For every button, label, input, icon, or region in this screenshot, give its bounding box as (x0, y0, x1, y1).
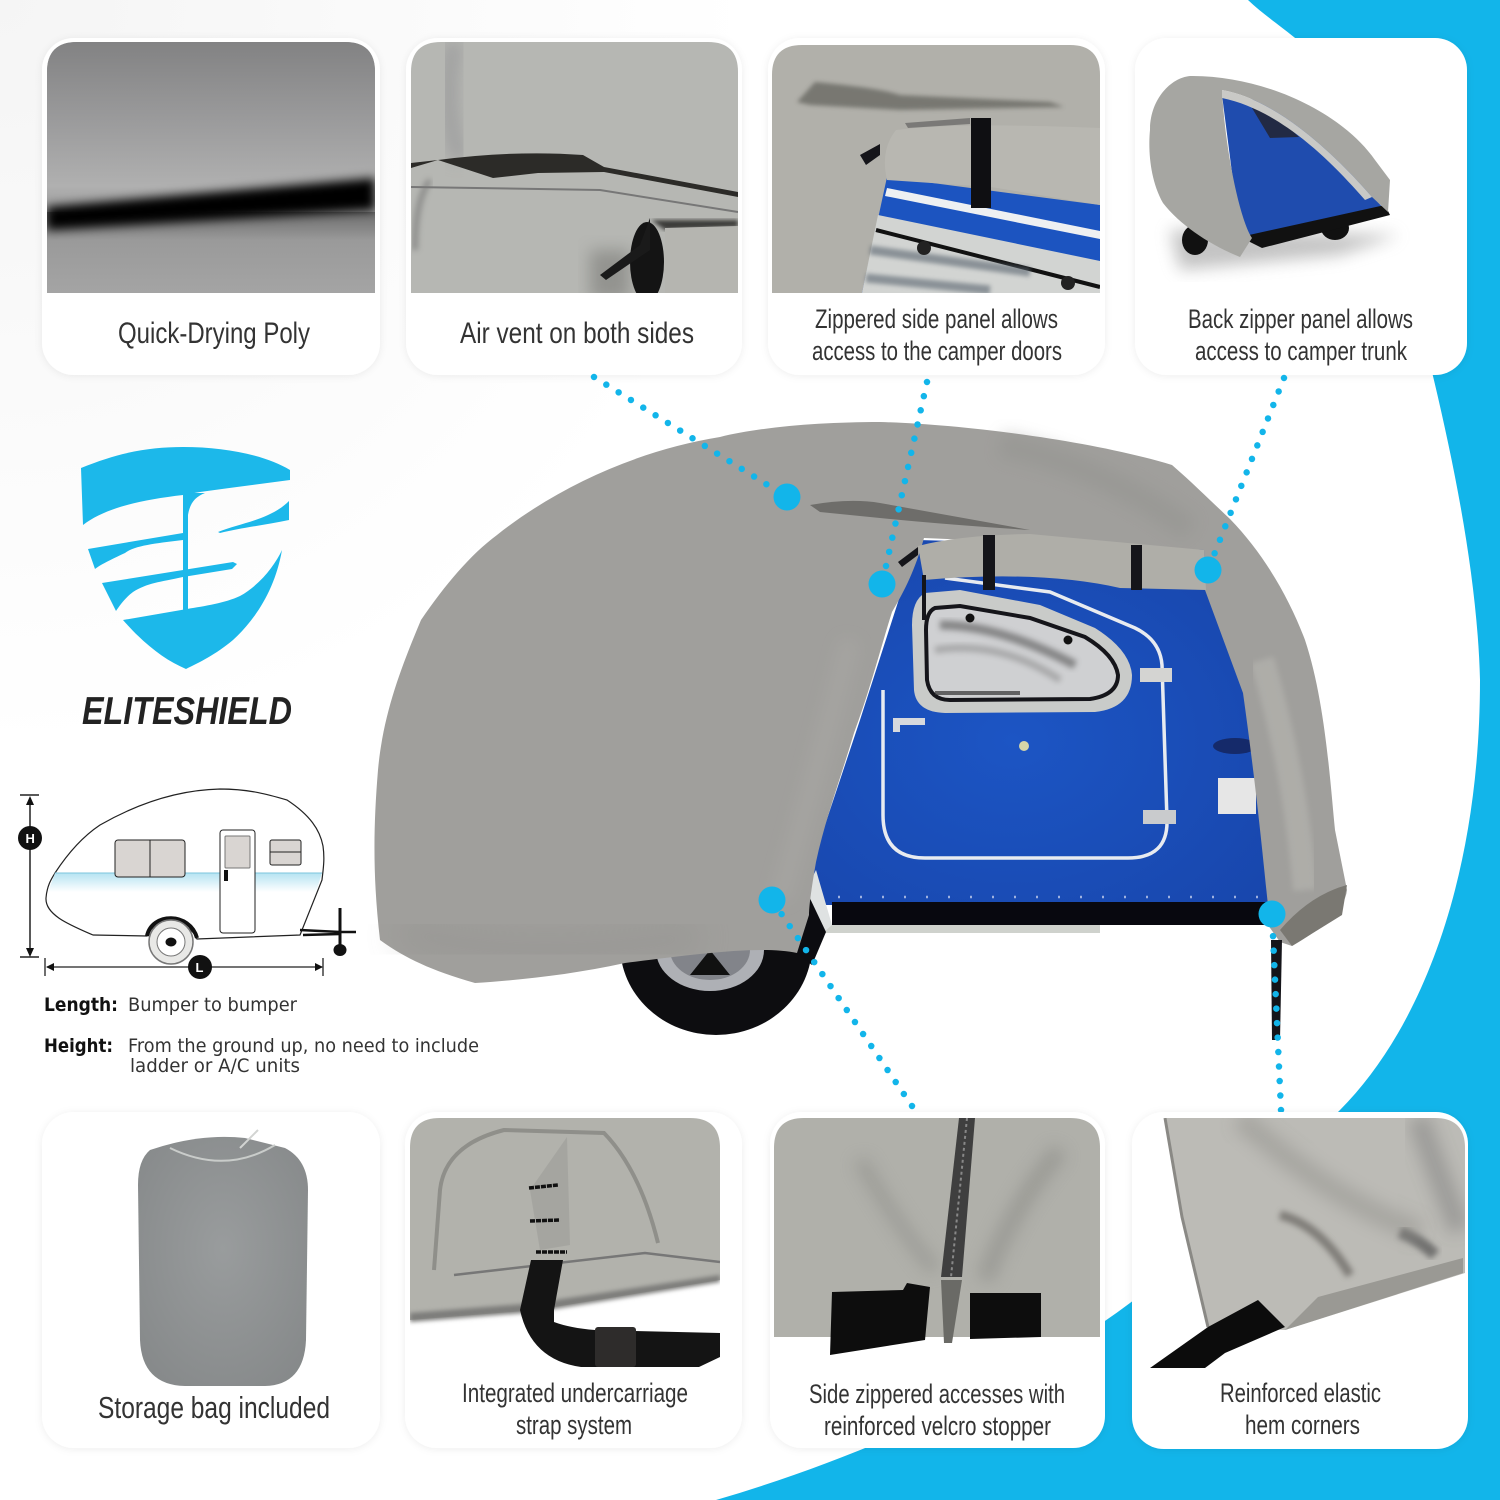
caption: Quick-Drying Poly (118, 317, 310, 350)
caption (1220, 1378, 1381, 1440)
measurement notes: Length: (44, 994, 118, 1016)
measurement notes: Bumper to bumper (128, 994, 297, 1016)
caption (1188, 304, 1413, 366)
blue swoosh background (716, 0, 1500, 1500)
measurement notes: ladder or A/C units (130, 1055, 300, 1077)
roll straps (898, 535, 1142, 620)
panel: undercarriage strap (405, 1112, 742, 1448)
panel: zippered side panel (768, 38, 1105, 375)
camper window (912, 590, 1132, 713)
caption: access to the camper doors (812, 336, 1062, 366)
photo: strap system (410, 1118, 720, 1367)
rolled up door panel (918, 534, 1206, 590)
measurement notes: Height: (44, 1035, 113, 1057)
callout points (758, 484, 1286, 928)
height dimension: H (26, 831, 35, 846)
panel: elastic hem corners (1132, 1112, 1468, 1449)
main photo: covered teardrop camper (374, 422, 1347, 1040)
photo: side panel (772, 45, 1100, 293)
elastic hem strap (1271, 940, 1282, 1040)
caption: reinforced velcro stopper (824, 1411, 1051, 1441)
door handle and hinges (893, 668, 1257, 824)
grey cover (374, 422, 1347, 983)
photo: air vent (411, 42, 738, 302)
length dimension: L (196, 960, 204, 975)
caption: Integrated undercarriage (462, 1378, 688, 1408)
caption (462, 1378, 688, 1440)
photo: elastic hem (1150, 1118, 1465, 1368)
caption (809, 1379, 1065, 1441)
caption: strap system (516, 1410, 632, 1440)
panel: storage bag (42, 1112, 380, 1448)
height dimension (18, 795, 42, 957)
logo: EliteShield shield (81, 447, 290, 669)
panel: air vent (406, 38, 742, 375)
photo: fabric close-up (47, 42, 375, 293)
caption: Air vent on both sides (460, 317, 694, 350)
brand name: ELITESHIELD (82, 690, 292, 733)
caption: hem corners (1245, 1410, 1360, 1440)
photo: storage bag (138, 1130, 308, 1386)
caption: access to camper trunk (1195, 336, 1407, 366)
panel: back zipper panel (1135, 38, 1467, 375)
caption: Reinforced elastic (1220, 1378, 1381, 1408)
photo: rear of covered camper (1149, 76, 1400, 270)
camper door outline (883, 578, 1167, 858)
caption: Back zipper panel allows (1188, 304, 1413, 334)
caption: Storage bag included (98, 1390, 330, 1425)
length dimension (45, 955, 323, 979)
cover shading and folds (400, 445, 1347, 949)
measurement notes (44, 994, 479, 1077)
dotted callout lines (594, 377, 1284, 1110)
camper underside rail (792, 870, 1272, 965)
trailer side view (46, 789, 356, 964)
panel: quick-drying poly (42, 38, 380, 375)
camper blue side panel (800, 540, 1272, 905)
caption: Side zippered accesses with (809, 1379, 1065, 1409)
panel: side zipper with velcro (770, 1112, 1105, 1448)
measurement notes: From the ground up, no need to include (128, 1035, 479, 1057)
measurement diagram (18, 789, 479, 1077)
photo: zipper and velcro (774, 1118, 1100, 1355)
caption (812, 304, 1062, 366)
caption: Zippered side panel allows (815, 304, 1058, 334)
camper wheel (620, 855, 812, 1035)
